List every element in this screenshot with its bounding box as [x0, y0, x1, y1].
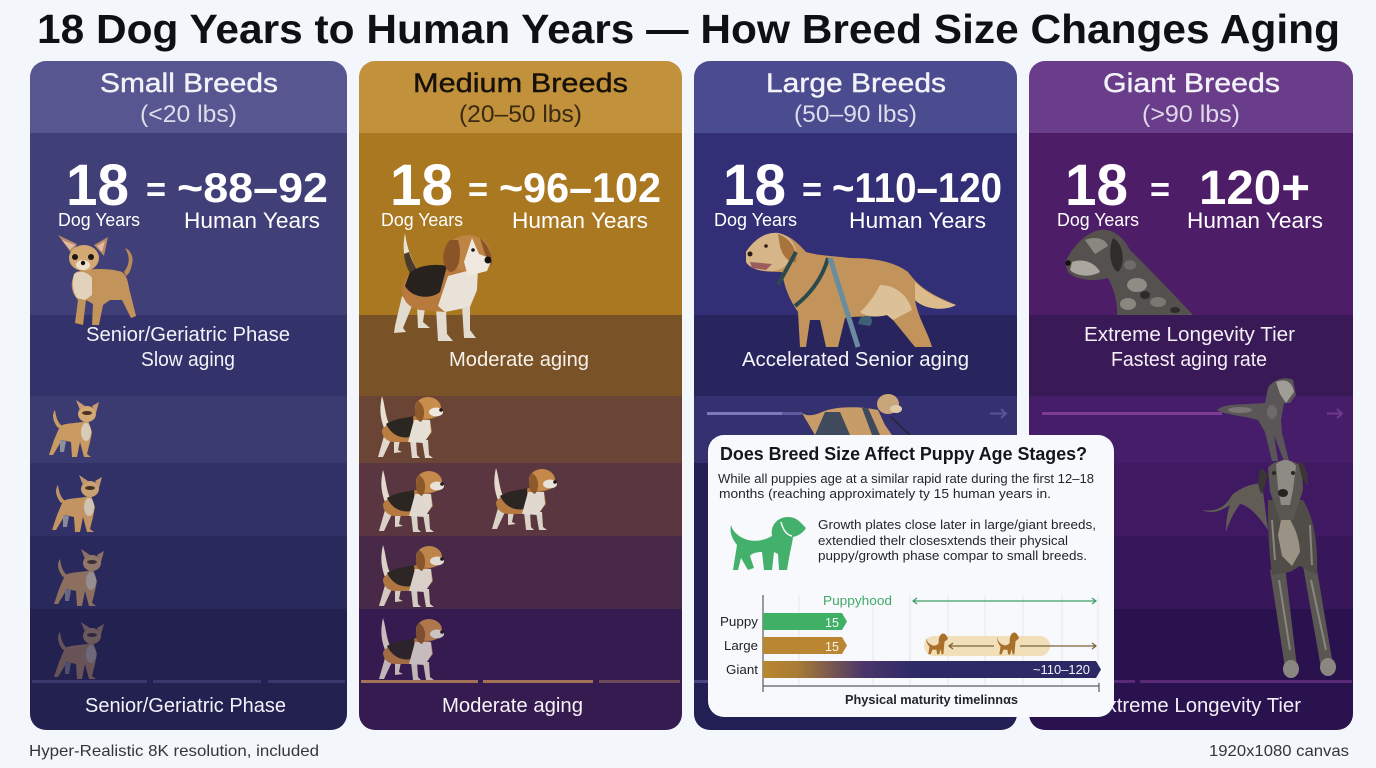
giant breeds conversion: =	[1150, 171, 1170, 209]
large breeds heading: (50–90 lbs)	[794, 101, 917, 128]
medium dog stage row 1	[378, 396, 443, 458]
large bar: 15	[825, 639, 839, 654]
small dog stage row 2	[52, 475, 102, 532]
footer note right: 1920x1080 canvas	[1209, 743, 1349, 760]
great dane upper photo	[1217, 378, 1296, 461]
giant breeds conversion: 18	[1065, 153, 1128, 218]
panel: small breeds	[30, 61, 347, 730]
small breeds conversion: Human Years	[184, 208, 320, 233]
bar labels: Puppy	[720, 614, 759, 629]
medium breeds heading: Medium Breeds	[413, 68, 628, 98]
small breeds aging label	[86, 324, 290, 371]
large breeds aging label: Accelerated Senior aging	[742, 349, 969, 371]
title: 18 Dog Years to Human Years — How Breed Size Changes Aging	[37, 6, 1340, 52]
giant breeds heading: (>90 lbs)	[1142, 101, 1240, 128]
medium dog stage row 2 second dog	[492, 468, 557, 530]
large breeds conversion: ~110–120	[832, 164, 1002, 211]
giant bar	[763, 661, 1101, 678]
puppy bar: 15	[825, 615, 839, 630]
small breeds heading: (<20 lbs)	[140, 101, 237, 128]
chihuahua photo	[58, 235, 136, 325]
giant breeds conversion: Human Years	[1187, 208, 1323, 233]
medium breeds conversion	[381, 153, 661, 233]
small breeds conversion: ~88–92	[177, 164, 328, 211]
beagle photo	[394, 233, 492, 341]
small labrador stage	[802, 394, 910, 435]
giant breeds footer label: Extreme Longevity Tier	[1093, 695, 1301, 717]
giant breeds conversion: 120+	[1199, 162, 1310, 215]
panel: large breeds	[694, 61, 1017, 730]
small breeds conversion: =	[146, 171, 166, 209]
medium breeds conversion: Dog Years	[381, 210, 463, 230]
small breeds footer label: Senior/Geriatric Phase	[85, 695, 286, 717]
large breeds conversion: =	[802, 171, 822, 209]
medium breeds conversion: Human Years	[512, 208, 648, 233]
giant breeds aging label	[1084, 324, 1295, 371]
medium dog stage row 4	[379, 618, 444, 680]
callout card: puppy age stages	[708, 435, 1114, 717]
medium breeds conversion: ~96–102	[499, 164, 661, 211]
small breeds aging label: Slow aging	[141, 349, 235, 371]
axes	[763, 595, 1099, 692]
large breeds heading: Large Breeds	[766, 68, 946, 98]
medium breeds conversion: 18	[390, 153, 453, 218]
medium dog stage row 2	[379, 470, 444, 532]
small dog stage row 1	[49, 400, 99, 457]
maturity timeline chart	[720, 593, 1101, 707]
medium breeds heading: (20–50 lbs)	[459, 101, 582, 128]
large bar	[763, 637, 847, 654]
giant breeds aging label: Fastest aging rate	[1111, 349, 1267, 371]
giant breeds aging label: Extreme Longevity Tier	[1084, 324, 1295, 346]
great dane standing photo	[1202, 460, 1336, 678]
callout growth plate text	[818, 517, 1096, 563]
large breeds conversion: Dog Years	[714, 210, 797, 230]
large breeds conversion: 18	[723, 153, 786, 218]
giant breeds conversion	[1057, 153, 1323, 233]
great dane bust photo	[1065, 230, 1193, 315]
large breeds conversion: Human Years	[849, 208, 986, 233]
callout intro text: months (reaching approximately ty 15 human years in.	[719, 486, 1051, 501]
callout growth plate text: puppy/growth phase compar to small breeds.	[818, 548, 1087, 563]
large breeds heading	[766, 68, 946, 128]
small breeds conversion: Dog Years	[58, 210, 140, 230]
puppyhood label and arrow	[823, 593, 1096, 608]
bar labels	[720, 614, 759, 677]
icon: green dog	[730, 517, 806, 570]
footer note left: Hyper-Realistic 8K resolution, included	[29, 743, 319, 760]
small breeds heading: Small Breeds	[100, 68, 278, 98]
medium breeds footer label: Moderate aging	[442, 695, 583, 717]
medium breeds conversion: =	[468, 171, 488, 209]
giant breeds heading	[1103, 68, 1280, 128]
bar labels: Large	[724, 638, 758, 653]
small breeds heading	[100, 68, 278, 128]
callout growth plate text: extendied thelr closesxtends their physical	[818, 533, 1068, 548]
callout intro text: While all puppies age at a similar rapid rate during the first 12–18	[718, 471, 1094, 486]
labrador photo	[746, 233, 956, 347]
bar labels: Giant	[726, 662, 758, 677]
puppyhood label and arrow: Puppyhood	[823, 593, 892, 608]
giant bar: ~110–120	[1033, 662, 1090, 677]
small breeds conversion	[58, 153, 328, 233]
small dog stage row 3	[54, 549, 104, 606]
medium dog stage row 3	[379, 545, 444, 607]
giant breeds heading: Giant Breeds	[1103, 68, 1280, 98]
callout heading: Does Breed Size Affect Puppy Age Stages?	[720, 444, 1087, 464]
callout intro text	[718, 471, 1094, 501]
medium breeds aging label: Moderate aging	[449, 349, 589, 371]
small dog stage row 4	[54, 622, 104, 679]
large breed growth range	[924, 633, 1096, 656]
giant breeds conversion: Dog Years	[1057, 210, 1139, 230]
callout growth plate text: Growth plates close later in large/giant breeds,	[818, 517, 1096, 532]
large breeds conversion	[714, 153, 1002, 233]
small breeds conversion: 18	[66, 153, 129, 218]
small breeds aging label: Senior/Geriatric Phase	[86, 324, 290, 346]
medium breeds heading	[413, 68, 628, 128]
panel: medium breeds	[359, 61, 682, 730]
puppy bar	[763, 613, 847, 630]
panel: giant breeds	[1029, 61, 1353, 730]
chart caption: Physical maturity timelinnαs	[845, 692, 1018, 707]
